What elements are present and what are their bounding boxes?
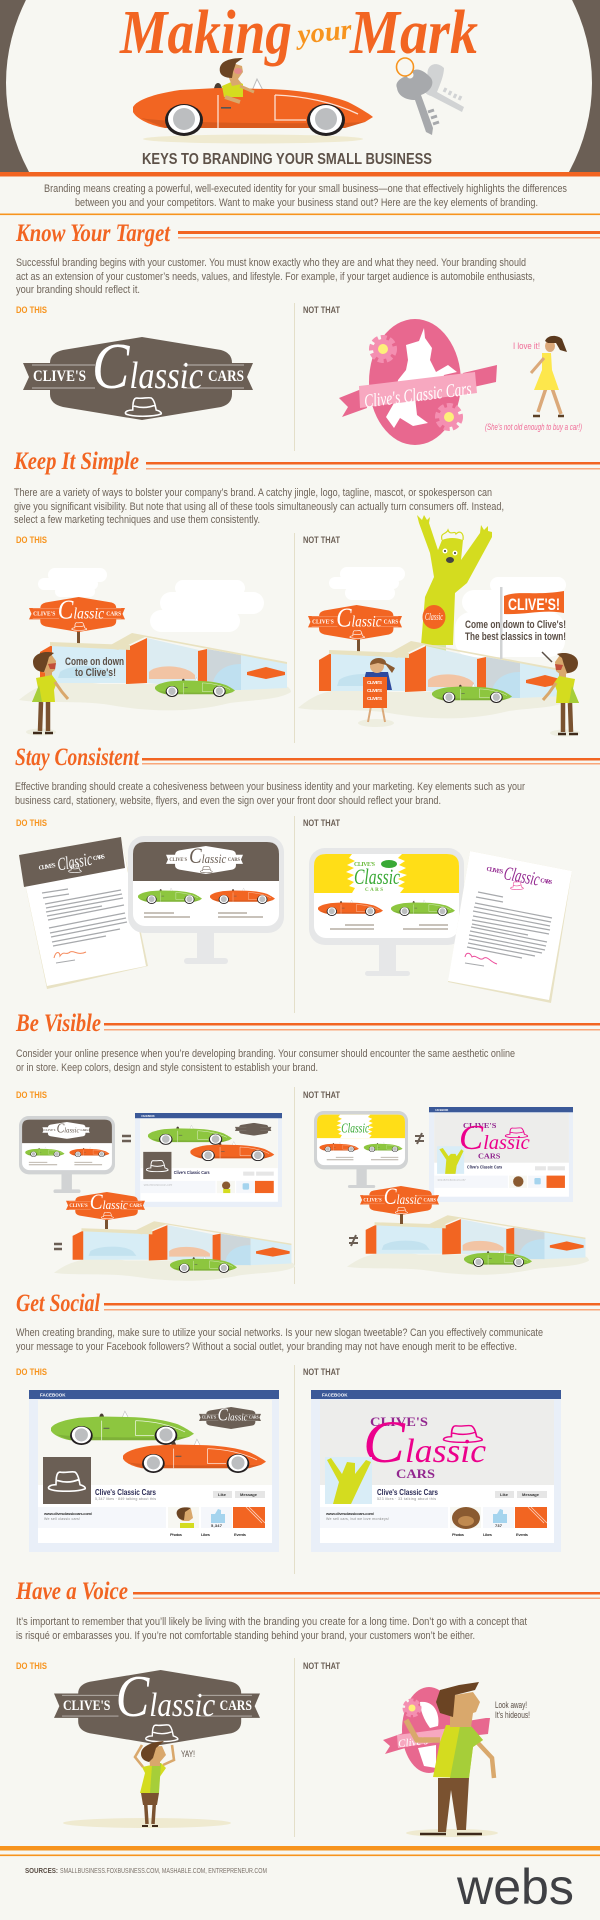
facebook page: not that: Likes [483,1532,493,1537]
monitor: inconsistent yellow site: Classic [354,864,400,889]
icon: equals [122,1136,131,1141]
text block: give you significant visibility. But note that using all of these tools simultaneously can actually turn consumers off. Instead, [14,501,504,513]
icon: driver and red car [133,58,373,136]
callout: yay: YAY! [181,1749,195,1759]
letterhead: purple [448,851,572,1003]
title: Making Your Mark: your [293,14,354,51]
shop sign logo: CARS [384,618,399,626]
facebook page: not that: Message [522,1492,540,1497]
facebook page: inconsistent: CARS [478,1152,500,1161]
icon: small man holding logo [135,1741,174,1826]
shop building [298,641,570,718]
logo: webs: webs [456,1859,574,1915]
girl with sandwich board: CLIVE'S [367,680,382,685]
monitor: inconsistent yellow site: CLIVE'S [354,862,376,868]
facebook page: do this: Message [240,1492,258,1497]
monitor: yellow: Classic [341,1121,369,1136]
subtitle: KEYS TO BRANDING YOUR SMALL BUSINESS [142,151,432,168]
section: Know Your Target [15,220,600,451]
speech: to Clive's! [75,667,116,679]
logo: brown raised: Classic [116,1663,215,1729]
monitor: inconsistent yellow site [309,848,464,976]
label: not that: NOT THAT [303,818,340,829]
monitor: consistent brown site [128,836,284,964]
clouds [329,567,566,657]
heading: Get Social [16,1290,100,1317]
title: Making Your Mark [119,0,478,67]
letterhead: brown: Classic [56,849,94,874]
facebook page: do this: Photos [170,1532,183,1537]
label: not that: NOT THAT [303,1661,340,1672]
speech: Come on down [65,656,124,668]
title: Making Your Mark: Making [119,0,292,67]
text block: is risqué or embarasses you. If you’re not comfortable standing behind your brand, your customers won’t be either. [16,1630,475,1642]
label: do this: DO THIS [16,1090,47,1101]
label: not that: NOT THAT [303,1090,340,1101]
heading: Be Visible [15,1010,101,1037]
logo: pink hidden behind man: Clive's [398,1735,429,1750]
shop sign logo: CLIVE'S [312,618,334,626]
facebook page: not that: www.clivesclassiccars.com/ [325,1511,375,1516]
text block: select a few marketing techniques and use them consistently. [14,514,260,526]
title: Making Your Mark: Mark [349,0,478,67]
shop building [347,1215,589,1275]
green car [170,1256,237,1273]
facebook page: do this: CLIVE'S [202,1415,216,1420]
icon: girl in yellow dress [531,336,567,416]
header panel [0,0,600,312]
sources [25,1866,267,1875]
icon: ground shadow under car [143,134,363,144]
text block: business card, stationery, website, flyers, and even the sign over your front door should reflect your brand. [15,795,441,807]
facebook page: not that: Photos [452,1532,465,1537]
facebook page: not that: Classic [363,1409,486,1475]
section: Stay Consistent [15,744,600,1013]
label: do this: DO THIS [16,305,47,316]
facebook page: not that: 523 likes · 33 talking about this [377,1497,436,1501]
letterhead: brown: CARS [93,854,106,862]
footer band [0,1846,600,1856]
facebook page: do this: Likes [201,1532,211,1537]
facebook page: do this: FACEBOOK [40,1392,66,1398]
section: Get Social [16,1290,600,1574]
girl with sandwich board: CLIVE'S [367,688,382,693]
facebook page: not that: We sell cars, but we love monkeys! [326,1517,389,1521]
speech [65,656,124,679]
facebook page: do this: Like [218,1492,227,1497]
facebook page: do this [29,1390,279,1552]
facebook page: not that: Like [500,1492,509,1497]
flag pole and flag: CLIVE'S! [508,595,560,614]
logo: brown raised: CLIVE'S [63,1698,110,1714]
shop sign logo: Classic [336,602,382,633]
text block: or in store. Keep colors, design and style consistent to establish your brand. [16,1062,318,1074]
ground shadow [63,1818,231,1828]
salesman [543,653,579,734]
facebook page: inconsistent: Clive's Classic Cars [467,1165,502,1170]
scene: not that dealership [298,515,580,736]
logo: pink unicorn [339,319,497,445]
facebook page: do this: We sell classic cars! [44,1517,80,1521]
logo: brown Clive's Classic Cars: Classic [92,330,203,403]
label: do this: DO THIS [16,1661,47,1672]
shop sign logo [308,602,402,640]
salesman [32,652,68,733]
monitor: brown: CARS [80,1128,88,1132]
facebook page: inconsistent: FACEBOOK [435,1109,449,1112]
label: not that: NOT THAT [303,305,340,316]
green car [432,683,512,703]
facebook page: inconsistent: www.clivesclassiccars.com/ [438,1178,466,1181]
section: Be Visible [15,1010,600,1284]
inflatable tube man: Classic [425,611,443,623]
facebook page: not that: Clive's Classic Cars [377,1488,438,1497]
shop sign logo: Classic [90,1189,128,1214]
icon: not equal [349,1235,358,1246]
sources: SOURCES: [25,1866,58,1875]
shop sign logo: CLIVE'S [363,1197,382,1203]
text block: your branding should reflect it. [16,284,140,296]
letterhead: purple: CLIVE'S [486,867,504,876]
facebook page: do this: CARS [249,1415,259,1420]
heading: Know Your Target [15,220,171,247]
green car [464,1250,532,1267]
label: do this: DO THIS [16,535,47,546]
facebook page: not that: Events [516,1532,529,1537]
facebook page: not that: CLIVE'S [370,1414,428,1429]
monitor: inconsistent yellow site: CARS [365,888,383,893]
facebook page: do this: Events [234,1532,247,1537]
intro text [44,183,567,209]
facebook page: not that: CARS [396,1466,435,1481]
text block [16,1616,527,1642]
section: Have a Voice [15,1578,600,1837]
speech: Come on down to Clive's! [465,619,566,631]
facebook page: do this: 5,347 [211,1523,223,1528]
monitor: consistent brown site: CARS [228,857,240,863]
inflatable tube man [417,515,492,685]
sources: SMALLBUSINESS.FOXBUSINESS.COM, MASHABLE.COM, ENTREPRENEUR.COM [60,1866,267,1875]
speech: The best classics in town! [465,631,566,643]
facebook page: not that [311,1390,561,1552]
facebook page: consistent: FACEBOOK [141,1115,155,1118]
ground shadow [406,1829,498,1837]
heading: Have a Voice [15,1578,128,1605]
shop building [19,633,291,710]
shop sign logo: CLIVE'S [69,1203,88,1209]
shop sign logo: Classic [384,1184,422,1209]
letterhead: brown [19,837,148,989]
text block [16,257,535,296]
text block [15,781,525,807]
logo: brown Clive's Classic Cars: CLIVE'S [33,368,86,385]
logo: brown raised [54,1663,260,1745]
shop sign logo [29,593,125,632]
logo: pink hidden behind man [383,1687,490,1773]
monitor: brown: Classic [57,1120,80,1135]
text block [16,1327,543,1353]
callout: look away: Look away! [495,1700,527,1710]
letterhead: purple: CARS [540,878,553,886]
clouds [38,568,264,632]
icon: big man [406,1682,494,1834]
green car [155,677,235,697]
heading: Stay Consistent [15,744,140,771]
facebook page: inconsistent: Classic [459,1118,530,1157]
letterhead: purple: Classic [502,863,542,891]
salesman ground shadow [26,728,56,736]
facebook page: consistent [135,1113,282,1207]
logo: pink unicorn: Clive's Classic Cars [363,379,473,413]
label: not that: NOT THAT [303,1367,340,1378]
facebook page: inconsistent: CLIVE'S [463,1121,496,1130]
shop sign logo: CARS [424,1197,436,1203]
speech [465,619,566,643]
text block [14,487,504,526]
shop sign logo: Classic [58,593,104,625]
callout: look away [495,1700,530,1720]
monitor: consistent brown site: Classic [189,843,227,868]
label: do this: DO THIS [16,1367,47,1378]
letterhead: brown: CLIVE'S [38,863,57,872]
shop sign logo [360,1184,439,1215]
scene: do this dealership [19,568,291,736]
monitor: consistent brown site: CLIVE'S [169,857,187,863]
label: not that: NOT THAT [303,535,340,546]
callout: I love it: I love it! [513,341,540,351]
facebook page: do this: 5,347 likes · 849 talking about this [95,1497,156,1501]
icon: not equal [415,1133,424,1144]
girl with sandwich board: CLIVE'S [367,696,382,701]
girl with sandwich board [358,658,395,727]
shop building [54,1221,295,1281]
shop sign logo: CLIVE'S [33,611,56,618]
monitor: brown: CLIVE'S [44,1128,56,1132]
section: Keep It Simple [13,448,600,743]
salesman ground shadow [550,730,580,736]
facebook page: do this: Classic [218,1405,248,1424]
text block [16,1048,515,1074]
monitor: yellow [314,1111,408,1188]
shop sign logo: CARS [130,1203,142,1209]
facebook page: consistent: www.clivesclassiccars.com/ [144,1184,172,1187]
icon: keys [396,58,464,135]
shop sign logo: CARS [106,611,121,618]
text block: There are a variety of ways to bolster your company’s brand. A catchy jingle, logo, tagline, mascot, or spokesperson can [14,487,492,499]
monitor: brown [19,1116,115,1193]
callout: look away: It's hideous! [495,1710,530,1720]
heading: Keep It Simple [13,448,139,475]
facebook page: not that: FACEBOOK [322,1392,348,1398]
facebook page: inconsistent [429,1107,573,1202]
flag pole and flag [500,587,564,659]
facebook page: do this: www.clivesclassiccars.com/ [43,1511,93,1516]
facebook page: do this: Clive's Classic Cars [95,1488,156,1497]
facebook page: consistent: Clive's Classic Cars [174,1170,210,1175]
icon: equals [54,1244,62,1249]
logo: brown Clive's Classic Cars [23,330,253,420]
shop sign logo [66,1189,145,1220]
label: do this: DO THIS [16,818,47,829]
logo: brown raised: CARS [220,1698,252,1714]
facebook page: not that: 737 [495,1523,503,1528]
logo: brown Clive's Classic Cars: CARS [208,368,244,385]
